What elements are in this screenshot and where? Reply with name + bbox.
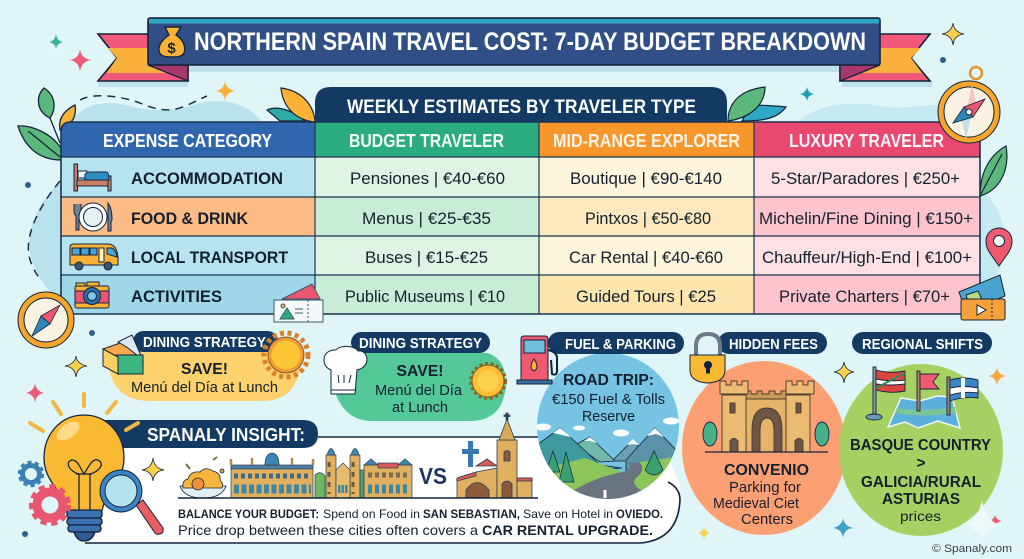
- text: vs: VS: [419, 463, 447, 489]
- title banner: [148, 18, 880, 65]
- weekly estimates tab: [315, 87, 727, 122]
- icon: chef hat: [324, 346, 367, 394]
- row: accommodation: Pensiones | €40-€60: [350, 169, 505, 188]
- icon: map pin: [986, 228, 1012, 266]
- text: balance your budget: Price drop between these cities often covers a: [178, 522, 478, 538]
- pill: regional shifts: REGIONAL SHIFTS: [862, 337, 983, 353]
- pill: dining strategy: [133, 331, 278, 352]
- pill: fuel and parking: [548, 332, 684, 354]
- panel: hidden fees: [682, 332, 846, 535]
- pill: dining strategy: DINING STRATEGY: [359, 336, 482, 352]
- row: local transport: [61, 236, 980, 275]
- row: activities: [61, 275, 980, 314]
- icon: right ribbon tail: [840, 34, 930, 81]
- icon: ticket and card: [959, 275, 1005, 320]
- table header row: EXPENSE CATEGORY: [103, 131, 272, 151]
- text: balance your budget: BALANCE YOUR BUDGET:: [178, 507, 319, 521]
- icon: money bag: [159, 27, 185, 57]
- icon: blue gear: [20, 462, 42, 486]
- text: convenio: Medieval Ciet: [713, 496, 799, 512]
- pill: spanaly insight: [105, 420, 318, 448]
- text: balance your budget: Save on Hotel in: [523, 507, 613, 521]
- panel: fuel and parking: [517, 332, 690, 505]
- icon: padlock: [690, 334, 725, 383]
- text: road trip: Reserve: [582, 408, 635, 425]
- icon: fuel pump: [517, 336, 557, 384]
- text: save menu del dia: [131, 361, 278, 396]
- icon: bus: [70, 244, 118, 270]
- text: save menu del dia: Menú del Día: [375, 383, 463, 399]
- pill: hidden fees: [718, 332, 827, 354]
- row: activities: Private Charters | €70+: [779, 287, 950, 306]
- text: road trip: €150 Fuel & Tolls: [552, 391, 665, 408]
- icon: medieval gate: [703, 381, 829, 452]
- row: local transport: LOCAL TRANSPORT: [131, 248, 289, 267]
- row: food and drink: Michelin/Fine Dining | €150+: [759, 209, 973, 228]
- icon: magnifying glass: [100, 470, 163, 534]
- icon: bed: [74, 164, 111, 191]
- illustration: mountains and road: [537, 418, 679, 499]
- pill: dining strategy: DINING STRATEGY: [143, 335, 266, 351]
- row: accommodation: [61, 157, 980, 197]
- text: basque country: ASTURIAS: [882, 491, 960, 508]
- row: food and drink: Pintxos | €50-€80: [585, 209, 711, 228]
- text: save menu del dia: SAVE!: [396, 363, 444, 380]
- icon: sun: [264, 333, 308, 377]
- icon: plate and cutlery: [74, 203, 112, 231]
- text: balance your budget: Spend on Food in: [323, 507, 420, 521]
- text: basque country: prices: [900, 508, 941, 524]
- icon: camera: [75, 282, 109, 308]
- row: food and drink: FOOD & DRINK: [131, 209, 249, 228]
- pill: fuel and parking: FUEL & PARKING: [565, 337, 676, 353]
- row: accommodation: 5-Star/Paradores | €250+: [771, 169, 960, 188]
- text: copyright: © Spanaly.com: [932, 543, 1012, 555]
- icon: tickets: [274, 284, 323, 322]
- row: local transport: Car Rental | €40-€60: [569, 248, 723, 267]
- icon: left ribbon tail: [98, 34, 188, 81]
- weekly estimates tab: WEEKLY ESTIMATES BY TRAVELER TYPE: [347, 97, 696, 118]
- icon: map and flags: [866, 367, 978, 428]
- pill: spanaly insight: SPANALY INSIGHT:: [147, 425, 305, 445]
- table header row: LUXURY TRAVELER: [789, 131, 944, 151]
- text: basque country: >: [916, 455, 926, 472]
- text: balance your budget: [178, 507, 663, 538]
- text: basque country: BASQUE COUNTRY: [850, 437, 992, 454]
- panel: cost table: [61, 122, 980, 314]
- text: convenio: Centers: [741, 512, 793, 528]
- row: activities: Public Museums | €10: [345, 287, 505, 306]
- text: save menu del dia: at Lunch: [392, 400, 448, 416]
- icon: money bag: $: [167, 40, 176, 57]
- text: save menu del dia: SAVE!: [181, 361, 228, 378]
- icon: red gear: [32, 487, 68, 523]
- text: basque country: [850, 437, 992, 524]
- text: balance your budget: CAR RENTAL UPGRADE.: [482, 522, 653, 538]
- icon: sun: [471, 364, 505, 398]
- icon: paella dish: [180, 457, 226, 498]
- panel: regional shifts: [839, 332, 1003, 536]
- text: convenio: CONVENIO: [724, 462, 809, 479]
- text: save menu del dia: Menú del Día at Lunch: [131, 380, 278, 396]
- table header row: [61, 122, 980, 157]
- icon: leaves left of table: [18, 88, 75, 160]
- row: activities: ACTIVITIES: [131, 287, 222, 306]
- row: local transport: Buses | €15-€25: [365, 248, 488, 267]
- icon: leaves left of tab: [267, 88, 315, 122]
- panel: spanaly insight: [85, 413, 680, 543]
- icon: oviedo cathedral: [457, 413, 532, 498]
- icon: leaf right of table: [980, 146, 1007, 196]
- row: food and drink: [61, 197, 980, 236]
- row: accommodation: ACCOMMODATION: [131, 169, 283, 188]
- table header row: BUDGET TRAVELER: [349, 131, 504, 151]
- icon: leaves right of tab: [728, 87, 786, 121]
- row: local transport: Chauffeur/High-End | €100+: [762, 248, 972, 267]
- title text: NORTHERN SPAIN TRAVEL COST: 7-DAY BUDGET BREAKDOWN: [194, 28, 866, 56]
- row: accommodation: Boutique | €90-€140: [570, 169, 722, 188]
- table header row: MID-RANGE EXPLORER: [553, 131, 740, 151]
- icon: compass top right: [938, 67, 1000, 143]
- text: convenio: Parking for: [729, 480, 801, 496]
- text: save menu del dia: [375, 363, 463, 416]
- icon: white sparkle: [965, 500, 1000, 540]
- text: balance your budget: SAN SEBASTIAN,: [423, 507, 520, 521]
- text: balance your budget: OVIEDO.: [616, 507, 663, 521]
- text: basque country: GALICIA/RURAL: [861, 474, 981, 491]
- icon: sparkle in insight: [142, 458, 164, 481]
- row: food and drink: Menus | €25-€35: [362, 209, 491, 228]
- text: road trip: ROAD TRIP:: [563, 372, 654, 389]
- pill: regional shifts: [852, 332, 992, 354]
- icon: compass bottom left: [18, 292, 74, 348]
- icon: san sebastian skyline: [231, 448, 412, 498]
- icon: light bulb: [44, 415, 124, 541]
- text: convenio: [713, 462, 809, 528]
- icon: rays of light bulb: [30, 394, 138, 431]
- text: road trip: [552, 372, 665, 425]
- row: activities: Guided Tours | €25: [576, 287, 716, 306]
- icon: food box: [103, 335, 143, 374]
- panel: dining strategy yellow: [103, 331, 308, 401]
- panel: dining strategy green: [324, 332, 506, 421]
- pill: hidden fees: HIDDEN FEES: [729, 337, 818, 353]
